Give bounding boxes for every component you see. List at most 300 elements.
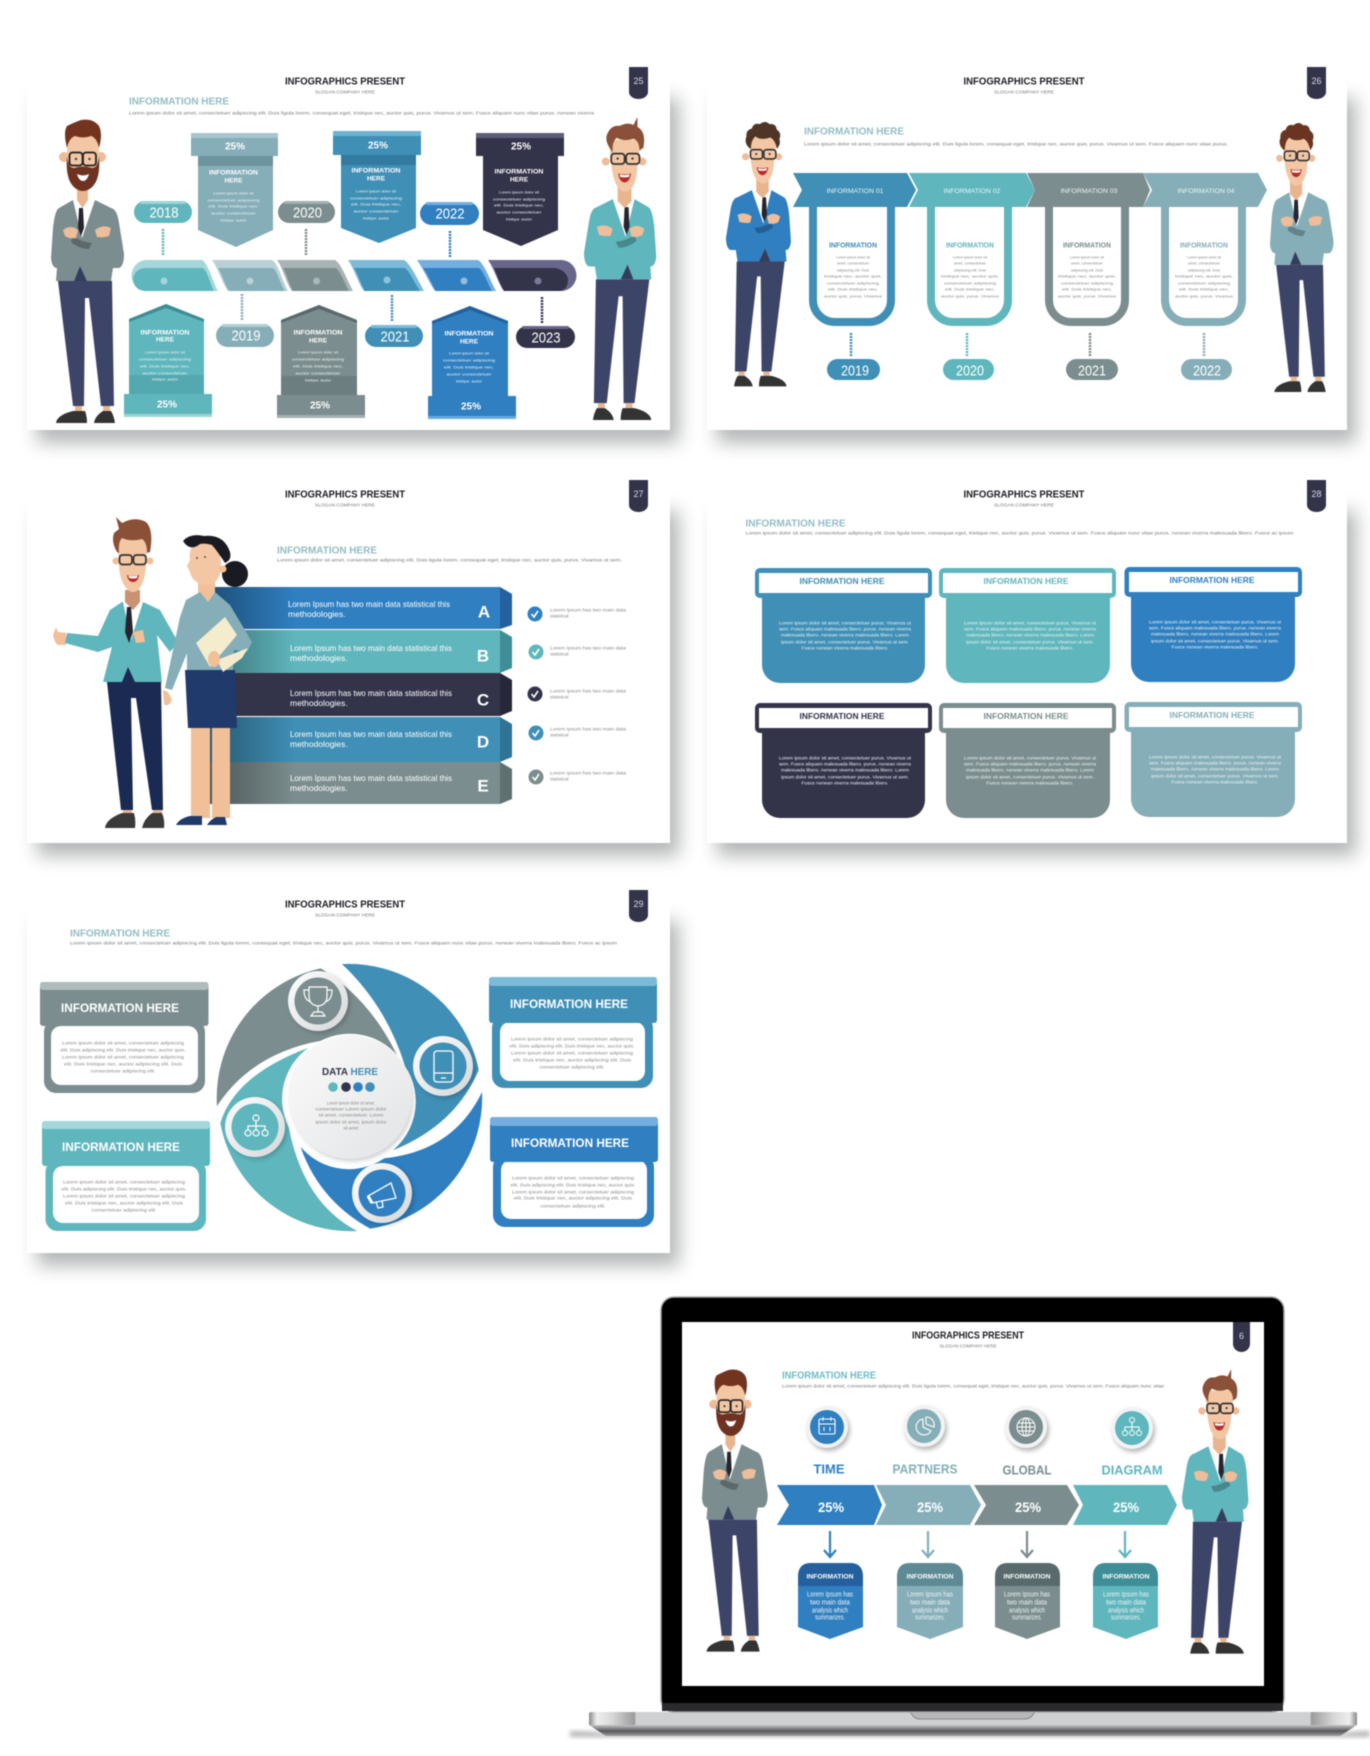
arrow 1 — [824, 1531, 836, 1557]
intro text — [70, 928, 617, 946]
info card: grey — [40, 982, 208, 1093]
icon: globe — [1005, 1406, 1049, 1451]
info card: blue: consectetuer adipiscing elit. — [540, 1204, 606, 1208]
panel: slide 27 list — [27, 480, 679, 856]
banner: 2023 up: auctor consectetuer — [496, 210, 542, 214]
card 5: sem. Fusce aliquam malesuada libero. purus. Aenean viverra — [964, 762, 1097, 766]
banner: 2019 up — [191, 133, 278, 247]
shield 1: summarizes. — [815, 1614, 845, 1622]
card 5: malesuada libero. Aenean viverra malesuada libero. Lorem — [966, 768, 1094, 772]
shield 2: INFORMATION — [906, 1574, 954, 1580]
check item D: statistical — [550, 732, 569, 738]
page tab 26 — [1307, 67, 1326, 99]
intro text: INFORMATION HERE — [746, 518, 846, 530]
banner: 2021 up: INFORMATION — [352, 168, 401, 174]
panel: slide 29 swirl — [27, 890, 679, 1266]
intro text: INFORMATION HERE — [277, 546, 377, 556]
banner: 2023 up: INFORMATION — [494, 168, 544, 176]
year pill 2020 — [278, 201, 335, 223]
info card: teal: elit. Duis adipiscing elit. Duis tristique nec, auctor quis. — [62, 1186, 186, 1192]
icon: hierarchy — [225, 1097, 287, 1159]
year pill 2021 — [365, 325, 423, 347]
year pill 2021 — [1066, 359, 1118, 380]
banner: 2023 up: tristique. auctor — [506, 216, 533, 222]
card: 2022 down — [428, 306, 516, 419]
card text 02: INFORMATION — [946, 242, 994, 250]
shield 3: INFORMATION — [1004, 1574, 1051, 1580]
year pill 2023: 2023 — [532, 330, 560, 346]
card: 2022 down: HERE — [460, 338, 479, 346]
card text 03 — [1058, 242, 1116, 298]
intro text: INFORMATION HERE — [804, 126, 904, 138]
shield 3: summarizes. — [1012, 1614, 1042, 1622]
chevron 3 — [974, 1485, 1079, 1525]
card text 02: consectetuer adipiscing — [944, 280, 996, 286]
banner: 2023 up — [476, 133, 564, 246]
card text 01: amet, consectetuer — [837, 260, 870, 266]
shield 3: analysis which — [1009, 1608, 1045, 1614]
bar B: methodologies. — [290, 653, 348, 663]
info card: teal: Lorem ipsum dolor sit amet, consectetuer adipiscing — [63, 1180, 186, 1184]
title — [285, 900, 405, 918]
check item A — [528, 606, 627, 622]
card: 2018 down — [124, 304, 212, 417]
title: INFOGRAPHICS PRESENT — [285, 76, 405, 88]
shield 1: Lorem Ipsum has — [807, 1592, 853, 1598]
year pill 2022: 2022 — [1193, 362, 1221, 380]
banner: 2019 up: HERE — [224, 178, 243, 184]
year pill 2019: 2019 — [841, 362, 869, 380]
card 4: Lorem ipsum dolor sit amet, consectetuer purus. Vivamus ut — [779, 756, 912, 760]
card 2: ipsum dolor sit amet, consectetuer purus. Vivamus ut sem. — [966, 640, 1094, 644]
info card: teal: INFORMATION HERE — [62, 1142, 180, 1154]
card text 03: tristique nec, auctor quis, — [1058, 274, 1116, 278]
title: SLOGAN COMPANY HERE — [994, 90, 1054, 94]
year pill 2022 — [420, 202, 479, 225]
card: 2022 down: elit. Duis tristique nec, — [444, 364, 494, 370]
card 2: sem. Fusce aliquam malesuada libero. purus. Aenean viverra — [964, 626, 1097, 632]
info card: blue: Lorem ipsum dolor sit amet, consectetuer adipiscing — [512, 1190, 635, 1194]
shield 2: summarizes. — [915, 1614, 945, 1622]
card 4: ipsum dolor sit amet, consectetuer purus. Vivamus ut sem. — [781, 774, 909, 780]
page tab 6: 6 — [1239, 1331, 1244, 1341]
bar C: C — [477, 690, 489, 710]
card: 2020 down: auctor consectetuer — [296, 370, 341, 376]
card 3: INFORMATION HERE — [1170, 575, 1255, 585]
bar C — [225, 673, 512, 716]
panel: slide 25 timeline — [27, 67, 679, 443]
page tab 27 — [629, 480, 648, 512]
card: 2018 down: INFORMATION — [140, 330, 190, 336]
page tab 27: 27 — [633, 489, 644, 499]
title: SLOGAN COMPANY HERE — [315, 502, 375, 508]
chevron 01: INFORMATION 01 — [826, 189, 884, 195]
card text 02: Lorem ipsum dolor sit — [953, 254, 988, 260]
banner: 2021 up: 25% — [368, 140, 388, 152]
shield 3: two main data — [1007, 1600, 1047, 1606]
banner: 2023 up: HERE — [510, 176, 529, 184]
card text 04: elit. Duis tristique nec, — [1179, 286, 1229, 292]
character: man in grey-blue jacket — [1270, 123, 1334, 392]
laptop screen: slide 6 — [682, 1322, 1264, 1686]
card: 2020 down: 25% — [310, 400, 330, 412]
bar D — [205, 717, 512, 762]
info card: grey: elit. Duis adipiscing elit. Duis tristique nec, auctor quis. — [60, 1048, 186, 1052]
card 4 — [755, 703, 932, 818]
card 2 — [939, 568, 1116, 683]
title — [285, 490, 405, 508]
intro text: Lorem ipsum dolor sit amet, consectetuer adipiscing elit. Duis ligula lorem, consequat eget, tristique nec, auctor quis, purus. Vivamus ut sem. Fusce aliquam nunc vitae purus. Aenean viverra — [129, 110, 595, 116]
info card: mid blue: consectetuer adipiscing elit. — [540, 1064, 604, 1070]
info card: grey: Lorem ipsum dolor sit amet, consectetuer adipiscing — [62, 1054, 185, 1060]
banner: 2023 up: consectetuer adipiscing — [493, 196, 545, 202]
bar B — [225, 630, 512, 673]
intro text: INFORMATION HERE — [129, 96, 229, 108]
card 5: INFORMATION HERE — [984, 711, 1069, 721]
bar C: Lorem Ipsum has two main data statistical this — [290, 688, 452, 698]
info card: mid blue: elit. Duis tristique nec, auctor adipiscing elit. Duis — [513, 1058, 632, 1062]
title: SLOGAN COMPANY HERE — [940, 1344, 996, 1348]
card text 02: auctor quis, purus. Vivamus — [941, 294, 999, 298]
card text 03: Lorem ipsum dolor sit — [1070, 254, 1105, 260]
banner: 2021 up: auctor consectetuer — [354, 208, 399, 214]
card: 2020 down: HERE — [309, 338, 328, 344]
check item B: statistical — [550, 652, 569, 656]
card 2: Fusce Aenean viverra malesuada libero. — [986, 646, 1074, 650]
bar E: methodologies. — [290, 783, 348, 793]
shield 2: analysis which — [912, 1608, 948, 1614]
banner: 2019 up: auctor consectetuer — [211, 210, 257, 216]
banner: 2019 up: consectetuer adipiscing — [208, 198, 260, 202]
card: 2020 down: consectetuer adipiscing — [292, 356, 344, 362]
card text 03: amet, consectetuer — [1071, 260, 1104, 266]
intro text — [804, 126, 1228, 146]
center circle — [288, 1035, 413, 1161]
card text 01: Lorem ipsum dolor sit — [836, 254, 871, 260]
card 3: Lorem ipsum dolor sit amet, consectetuer purus. Vivamus ut — [1149, 620, 1282, 624]
card 3: Fusce Aenean viverra malesuada libero. — [1172, 644, 1258, 650]
bar E: E — [477, 776, 489, 796]
bar C: methodologies. — [290, 698, 348, 708]
chevron 03 — [1027, 173, 1150, 207]
laptop mockup — [570, 1297, 1370, 1737]
card 6: Fusce Aenean viverra malesuada libero. — [1172, 780, 1258, 784]
card text 04: auctor quis, purus. Vivamus — [1175, 294, 1233, 298]
check item C: statistical — [550, 694, 569, 700]
banner: 2021 up: HERE — [367, 176, 386, 182]
bar D: Lorem Ipsum has two main data statistical this — [290, 729, 452, 739]
card 4: malesuada libero. Aenean viverra malesuada libero. Lorem — [781, 768, 909, 772]
card: 2018 down: tristique. auctor — [152, 376, 179, 382]
card: 2022 down: Lorem ipsum dolor sit — [449, 350, 490, 356]
year pill 2020 — [943, 359, 994, 380]
card 6: sem. Fusce aliquam malesuada libero. purus. Aenean viverra — [1149, 760, 1282, 766]
arrow 3 — [1021, 1531, 1033, 1557]
card 5: Fusce Aenean viverra malesuada libero. — [986, 780, 1074, 786]
card text 04: tristique nec, auctor quis, — [1175, 274, 1233, 278]
banner: 2019 up: INFORMATION — [209, 170, 258, 176]
shield 4: INFORMATION — [1102, 1574, 1150, 1580]
icon: trophy — [288, 971, 350, 1033]
title — [964, 76, 1084, 94]
info card: blue: INFORMATION HERE — [511, 1138, 629, 1150]
year pill 2020: 2020 — [293, 204, 322, 222]
card 3: ipsum dolor sit amet, consectetuer purus. Vivamus ut sem. — [1151, 638, 1279, 644]
shield 3 — [995, 1563, 1060, 1639]
year pill 2021: 2021 — [380, 328, 410, 346]
laptop bezel — [661, 1297, 1284, 1712]
card: 2018 down: elit. Duis tristique nec, — [140, 364, 190, 368]
title: INFOGRAPHICS PRESENT — [964, 76, 1084, 88]
card 6 — [1124, 702, 1302, 817]
intro text: INFORMATION HERE — [782, 1370, 876, 1382]
icon: diagram — [1111, 1407, 1155, 1452]
chevron 02 — [909, 173, 1035, 207]
card text 01: tristique nec, auctor quis, — [824, 274, 882, 278]
character: woman with folder — [163, 535, 252, 825]
intro text: INFORMATION HERE — [70, 928, 170, 940]
year pill 2022: 2022 — [436, 206, 464, 222]
card 3: sem. Fusce aliquam malesuada libero. purus. Aenean viverra — [1149, 626, 1282, 630]
year pill 2021: 2021 — [1078, 362, 1106, 380]
card 2: malesuada libero. Aenean viverra malesuada libero. Lorem — [966, 632, 1094, 638]
title: INFOGRAPHICS PRESENT — [912, 1330, 1024, 1342]
shield 2 — [897, 1563, 963, 1639]
card 4: INFORMATION HERE — [800, 711, 885, 721]
shield 4: two main data — [1106, 1600, 1146, 1606]
chevron 3: 25% — [1015, 1499, 1042, 1515]
card text 03: elit. Duis tristique nec, — [1062, 286, 1112, 292]
icon: calendar — [806, 1406, 850, 1451]
bar E — [203, 762, 512, 804]
banner: 2019 up: tristique. auctor — [220, 218, 247, 222]
card text 02: elit. Duis tristique nec, — [945, 286, 995, 292]
info card: mid blue: Lorem ipsum dolor sit amet, consectetuer adipiscing — [511, 1036, 634, 1042]
laptop base — [589, 1712, 1357, 1736]
chevron 04: INFORMATION 04 — [1178, 189, 1235, 195]
info card: mid blue — [489, 977, 657, 1088]
intro text — [782, 1370, 1165, 1388]
bar D: D — [477, 732, 489, 752]
intro text: Lorem ipsum dolor sit amet, consectetuer adipiscing elit. Duis ligula lorem, consequat eget, tristique nec, auctor quis, purus. Vivamus ut sem. — [277, 558, 622, 562]
card text 04 — [1175, 242, 1233, 298]
title: INFOGRAPHICS PRESENT — [285, 900, 405, 910]
info card: teal: Lorem ipsum dolor sit amet, consectetuer adipiscing — [63, 1194, 186, 1198]
check item C — [528, 686, 627, 702]
card: 2022 down: consectetuer adipiscing — [443, 358, 495, 362]
center circle: ipsum dolor sit amet, ipsum dolor — [316, 1120, 387, 1124]
card text 01: elit. Duis tristique nec, — [828, 286, 878, 292]
page tab 29: 29 — [633, 899, 644, 909]
info card: blue: elit. Duis tristique nec, auctor adipiscing elit. Duis — [514, 1196, 633, 1200]
banner: 2019 up: 25% — [225, 142, 245, 152]
card: 2020 down: Lorem ipsum dolor sit — [298, 350, 339, 354]
bar E: Lorem Ipsum has two main data statistical this — [290, 773, 452, 783]
info card: grey: Lorem ipsum dolor sit amet, consectetuer adipiscing — [62, 1040, 185, 1046]
card text 03: INFORMATION — [1063, 242, 1111, 250]
info card: blue: Lorem ipsum dolor sit amet, consectetuer adipiscing — [512, 1176, 635, 1180]
banner: 2021 up: Lorem ipsum dolor sit — [356, 188, 397, 194]
intro text — [277, 546, 622, 562]
title — [964, 490, 1084, 508]
card 4: Fusce Aenean viverra malesuada libero. — [802, 780, 888, 786]
page tab 25: 25 — [633, 76, 644, 86]
banner: 2019 up: elit. Duis tristique nec, — [208, 204, 258, 208]
card text 01: adipiscing elit. Duis — [837, 268, 869, 272]
shield 2: two main data — [910, 1600, 950, 1606]
icon: megaphone — [352, 1163, 414, 1225]
card: 2018 down: HERE — [156, 336, 175, 344]
bar A — [214, 587, 512, 629]
card text 03: adipiscing elit. Duis — [1071, 268, 1103, 272]
chevron 04 — [1143, 173, 1267, 207]
bar A: Lorem Ipsum has two main data statistical this — [288, 599, 450, 609]
title — [912, 1330, 1024, 1348]
card: 2022 down: tristique. auctor — [456, 378, 483, 384]
year pill 2023 — [516, 326, 575, 348]
card 1: Fusce Aenean viverra malesuada libero. — [802, 646, 888, 650]
card: 2022 down: auctor consectetuer — [446, 372, 492, 376]
info card: blue — [490, 1117, 658, 1227]
banner: 2021 up: tristique. auctor — [363, 216, 390, 220]
chevron 4: 25% — [1113, 1499, 1140, 1515]
page tab 28 — [1307, 480, 1326, 512]
check item D: Lorem Ipsum has two main data — [550, 726, 627, 732]
card 5 — [939, 703, 1116, 818]
connector lines — [163, 229, 542, 323]
banner: 2023 up: 25% — [511, 142, 531, 152]
laptop shadow — [570, 1731, 1370, 1737]
year pill 2019: 2019 — [232, 328, 260, 344]
card text 04: INFORMATION — [1180, 242, 1228, 250]
arrow 4 — [1119, 1531, 1131, 1557]
check item C: Lorem Ipsum has two main data — [550, 688, 627, 694]
swirl diagram — [215, 963, 483, 1232]
banner: 2023 up: elit. Duis tristique nec, — [494, 202, 544, 208]
card text 04: amet, consectetuer — [1188, 260, 1221, 266]
chevron 01 — [793, 173, 916, 207]
banner: 2021 up: consectetuer adipiscing — [350, 196, 402, 200]
bar A: methodologies. — [288, 609, 346, 619]
card: 2018 down: Lorem ipsum dolor sit — [145, 350, 186, 354]
card text 01 — [824, 242, 882, 298]
card 4: sem. Fusce aliquam malesuada libero. purus. Aenean viverra — [779, 762, 912, 766]
bar A: A — [478, 602, 490, 622]
title: INFOGRAPHICS PRESENT — [964, 490, 1084, 500]
card frames — [813, 207, 1242, 322]
chevron 1 — [777, 1485, 882, 1525]
title: SLOGAN COMPANY HERE — [994, 502, 1054, 508]
check item A: Lorem Ipsum has two main data — [550, 608, 627, 612]
panel: slide 26 process — [707, 67, 1356, 443]
page tab 25 — [629, 67, 648, 99]
card text 02: adipiscing elit. Duis — [954, 268, 986, 272]
label DIAGRAM: DIAGRAM — [1102, 1462, 1162, 1478]
year pill 2018 — [134, 201, 192, 223]
card 5: Lorem ipsum dolor sit amet, consectetuer purus. Vivamus ut — [964, 756, 1097, 760]
intro text — [746, 518, 1294, 536]
info card: mid blue: Lorem ipsum dolor sit amet, consectetuer adipiscing — [511, 1050, 634, 1056]
info card: grey: consectetuer adipiscing elit. — [90, 1068, 156, 1074]
card: 2018 down: auctor consectetuer — [142, 370, 188, 376]
bar B: Lorem Ipsum has two main data statistical this — [290, 643, 452, 653]
check item E: statistical — [550, 776, 569, 782]
bar D: methodologies. — [290, 739, 348, 749]
center circle: Lorem ipsum dolor sit amet, — [327, 1100, 375, 1106]
card 5: ipsum dolor sit amet, consectetuer purus. Vivamus ut sem. — [966, 774, 1094, 780]
info card: blue: elit. Duis adipiscing elit. Duis tristique nec, auctor quis. — [510, 1182, 636, 1188]
card 1: Lorem ipsum dolor sit amet, consectetuer purus. Vivamus ut — [779, 620, 912, 626]
check item D — [528, 726, 627, 740]
center circle: DATA HERE — [322, 1066, 378, 1078]
shield 1 — [798, 1563, 863, 1639]
card text 02 — [941, 242, 999, 298]
card 1: INFORMATION HERE — [800, 576, 885, 586]
intro text — [129, 96, 595, 116]
intro text: Lorem ipsum dolor sit amet, consectetuer adipiscing elit. Duis ligula lorem, consequat eget, tristique nec, auctor quis, purus. Vivamus ut sem. Fusce aliquam nunc vitae purus. — [804, 142, 1228, 146]
page tab 29 — [629, 890, 648, 922]
card text 03: consectetuer adipiscing — [1061, 280, 1113, 286]
year pill 2022 — [1181, 359, 1232, 380]
character: man in blue jacket — [726, 122, 791, 386]
chevron 03: INFORMATION 03 — [1060, 189, 1118, 195]
card: 2018 down: 25% — [157, 400, 177, 410]
year pill 2018: 2018 — [150, 204, 178, 222]
check item A: statistical — [550, 614, 569, 618]
shield 2: Lorem Ipsum has — [907, 1592, 953, 1598]
card text 01: auctor quis, purus. Vivamus — [824, 294, 882, 298]
card: 2022 down: 25% — [461, 402, 481, 412]
card text 01: INFORMATION — [829, 242, 877, 250]
character: man in teal jacket — [1182, 1369, 1248, 1654]
card 1: sem. Fusce aliquam malesuada libero. purus. Aenean viverra — [779, 626, 912, 632]
shield 1: INFORMATION — [806, 1574, 854, 1580]
page tab 26: 26 — [1311, 76, 1322, 86]
label TIME: TIME — [814, 1462, 845, 1476]
info card: grey: INFORMATION HERE — [61, 1003, 179, 1015]
chevron 1: 25% — [818, 1499, 845, 1515]
card 1: malesuada libero. Aenean viverra malesuada libero. Lorem — [781, 632, 909, 638]
card 3: malesuada libero. Aenean viverra malesuada libero. Lorem — [1151, 632, 1279, 636]
card: 2020 down: INFORMATION — [294, 330, 343, 336]
info card: teal: consectetuer adipiscing elit. — [92, 1208, 156, 1212]
info card: teal: elit. Duis tristique nec, auctor adipiscing elit. Duis — [65, 1200, 184, 1206]
card 1 — [755, 568, 932, 683]
connector lines — [851, 333, 1204, 356]
card text 04: adipiscing elit. Duis — [1188, 268, 1220, 272]
shield 4: analysis which — [1108, 1608, 1144, 1614]
timeline ribbon — [132, 260, 576, 291]
card text 02: amet, consectetuer — [954, 260, 987, 266]
title — [285, 76, 405, 94]
card text 04: consectetuer adipiscing — [1178, 280, 1230, 286]
card: 2020 down: tristique. auctor — [305, 378, 332, 382]
info card: mid blue: elit. Duis adipiscing elit. Duis tristique nec, auctor quis. — [510, 1044, 634, 1048]
character: man in teal jacket — [584, 117, 656, 420]
year pill 2019 — [827, 359, 880, 380]
card: 2022 down: INFORMATION — [444, 330, 494, 338]
year pill 2019 — [216, 324, 274, 347]
banner: 2021 up — [333, 131, 421, 243]
character: bearded man — [51, 120, 124, 423]
card 1: ipsum dolor sit amet, consectetuer purus. Vivamus ut sem. — [781, 640, 909, 644]
page tab 6 — [1233, 1322, 1250, 1352]
banner: 2021 up: elit. Duis tristique nec, — [351, 202, 401, 206]
banner: 2023 up: Lorem ipsum dolor sit — [499, 190, 540, 194]
card 6: ipsum dolor sit amet, consectetuer purus. Vivamus ut sem. — [1151, 774, 1279, 778]
check item B — [528, 644, 627, 660]
character: presenting man — [53, 517, 178, 828]
